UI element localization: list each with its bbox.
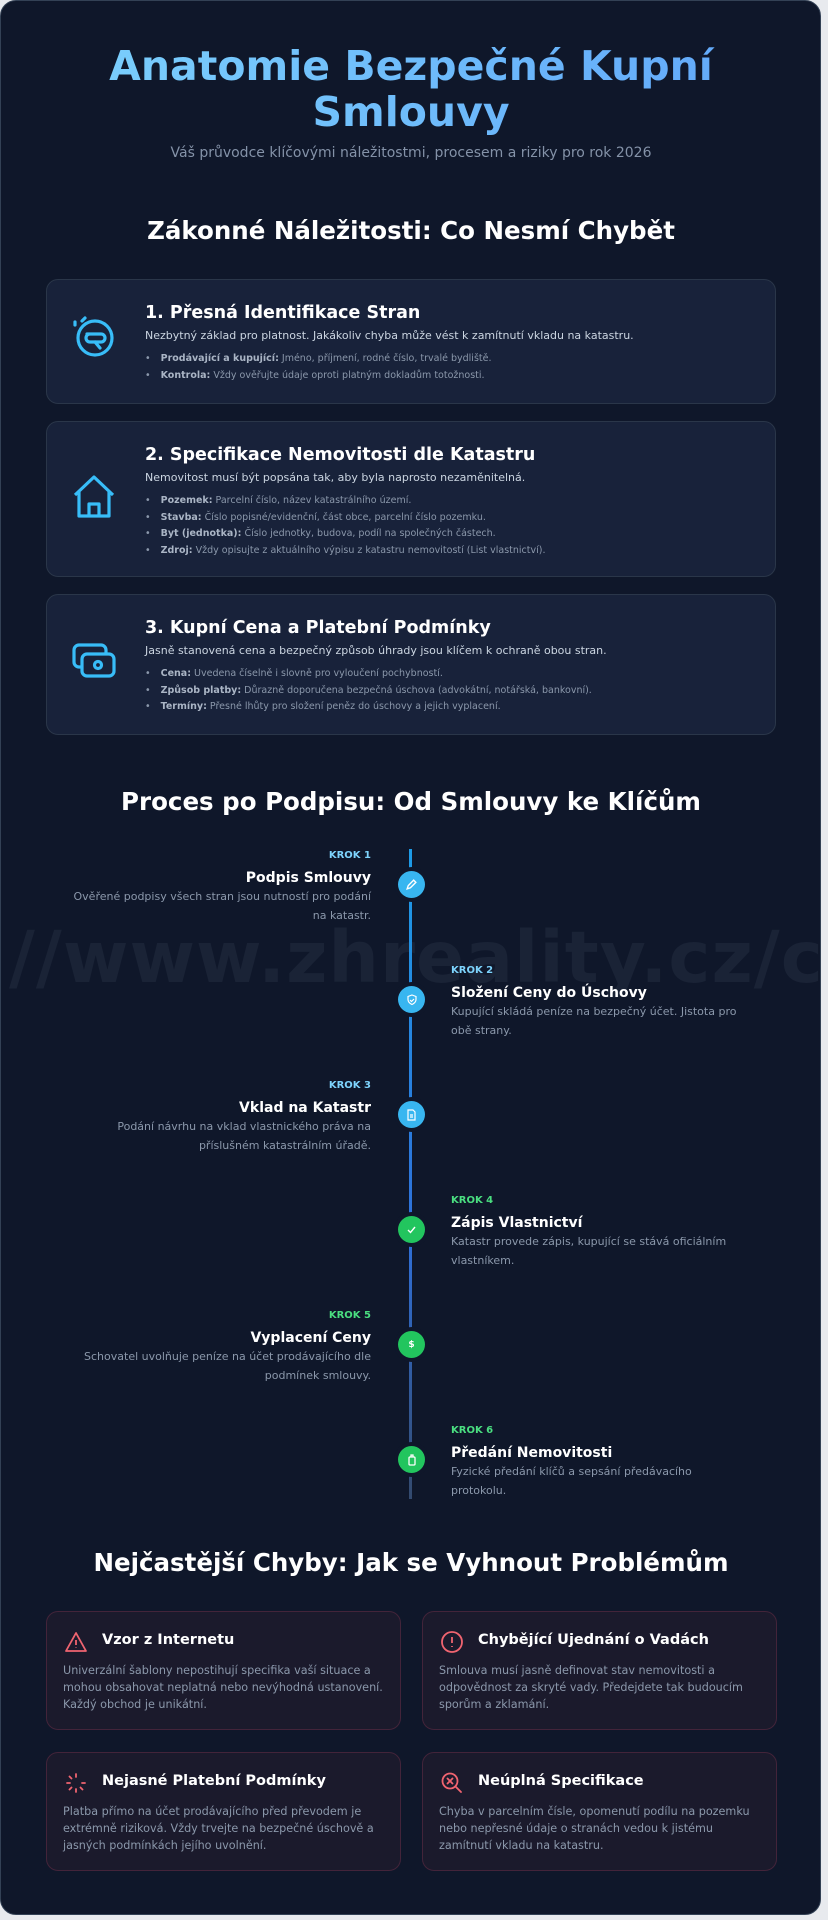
step 5: Vyplacení Ceny [250, 1330, 371, 1346]
panel: property specification: Byt (jednotka): Číslo jednotky, budova, podíl na společných částech. [161, 528, 496, 539]
step 1: KROK 1 [329, 850, 371, 861]
heading: process: Proces po Podpisu: Od Smlouvy ke Klíčům [121, 787, 701, 816]
icon: search x [442, 1772, 462, 1793]
title: Anatomie Bezpečné Kupní [109, 42, 713, 90]
icon: money [72, 643, 116, 678]
step 1: Ověřené podpisy všech stran jsou nutností pro podání [74, 890, 371, 903]
icon: exclamation [441, 1631, 463, 1653]
step 4: Katastr provede zápis, kupující se stává oficiálním [451, 1235, 726, 1248]
step 3: Vklad na Katastr [239, 1100, 371, 1116]
step 1 [74, 850, 372, 922]
step 6: Předání Nemovitosti [451, 1445, 612, 1461]
step 3: příslušném katastrálním úřadě. [199, 1138, 371, 1152]
panel: internet template: Vzor z Internetu [102, 1632, 234, 1648]
panel: incomplete spec: Neúplná Specifikace [478, 1773, 644, 1789]
panel: property specification: Stavba: Číslo popisné/evidenční, část obce, parcelní číslo pozemku. [161, 512, 486, 522]
panel: price: Cena: Uvedena číselně i slovně pro vyloučení pochybností. [161, 668, 443, 679]
step 5: Schovatel uvolňuje peníze na účet prodávajícího dle [84, 1350, 371, 1363]
panel: identification: Kontrola: Vždy ověřujte údaje oproti platným dokladům totožnosti. [161, 370, 485, 380]
step 6: Fyzické předání klíčů a sepsání předávacího [451, 1465, 692, 1478]
step 1: na katastr. [313, 908, 371, 922]
title: Smlouvy [312, 88, 510, 136]
step 2: obě strany. [451, 1024, 512, 1036]
panel: defects: Smlouva musí jasně definovat stav nemovitosti a odpovědnost za skryté vady. Předejdete tak budoucím sporům a zklamání. [439, 1664, 743, 1711]
step 5: KROK 5 [329, 1310, 371, 1321]
step 3 [117, 1080, 371, 1152]
heading: legal requirements: Zákonné Náležitosti: Co Nesmí Chybět [147, 216, 675, 245]
panel: price: 3. Kupní Cena a Platební Podmínky [145, 618, 491, 638]
panel: internet template [46, 1611, 401, 1730]
panel: price: Způsob platby: Důrazně doporučena bezpečná úschova (advokátní, notářská, bankovní). [161, 684, 592, 696]
step 6: protokolu. [451, 1484, 506, 1496]
panel: price: Termíny: Přesné lhůty pro složení peněz do úschovy a jejich vyplacení. [161, 701, 501, 712]
panel: incomplete spec: Chyba v parcelním čísle, opomenutí podílu na pozemku nebo nepřesné údaje o stranách vedou k jistému zamítnutí vkladu na katastru. [439, 1805, 750, 1852]
timeline dot 3 [398, 1101, 425, 1128]
panel: unclear payment [46, 1752, 401, 1871]
panel: property specification: Nemovitost musí být popsána tak, aby byla naprosto nezaměnitelná. [145, 471, 525, 484]
panel: identification [46, 279, 776, 404]
panel: unclear payment: Platba přímo na účet prodávajícího před převodem je extrémně riziková. Vždy trvejte na bezpečné úschově a jasných podmínkách jejího uvolnění. [63, 1805, 374, 1852]
panel: property specification: Pozemek: Parcelní číslo, název katastrálního území. [161, 495, 411, 506]
panel: incomplete spec [422, 1752, 777, 1871]
panel: property specification [46, 421, 776, 577]
panel: identification: Prodávající a kupující: Jméno, příjmení, rodné číslo, trvalé bydliště. [161, 353, 492, 364]
icon: house [74, 475, 114, 518]
timeline line [409, 849, 412, 1499]
subtitle: Váš průvodce klíčovými náležitostmi, procesem a riziky pro rok 2026 [170, 145, 652, 161]
step 5: podmínek smlouvy. [265, 1368, 371, 1382]
step 6 [451, 1425, 692, 1496]
icon: warning [65, 1632, 87, 1652]
step 3: Podání návrhu na vklad vlastnického práva na [117, 1120, 371, 1133]
panel: price [46, 594, 776, 735]
step 4 [451, 1195, 726, 1266]
heading: mistakes: Nejčastější Chyby: Jak se Vyhnout Problémům [93, 1548, 729, 1577]
panel: defects [422, 1611, 777, 1730]
panel: internet template: Univerzální šablony nepostihují specifika vaší situace a mohou obsahovat neplatná nebo nevýhodná ustanovení. Každý obchod je unikátní. [63, 1664, 383, 1711]
icon: loader [66, 1773, 86, 1793]
panel: property specification: 2. Specifikace Nemovitosti dle Katastru [145, 445, 535, 465]
timeline dot 5 [398, 1331, 425, 1358]
panel: identification: Nezbytný základ pro platnost. Jakákoliv chyba může vést k zamítnutí vkladu na katastru. [145, 329, 634, 342]
step 1: Podpis Smlouvy [246, 870, 371, 886]
timeline dot 4 [398, 1216, 425, 1243]
panel: defects: Chybějící Ujednání o Vadách [478, 1632, 709, 1648]
timeline dot 1 [398, 871, 425, 898]
step 2: KROK 2 [451, 965, 493, 976]
timeline dot 2 [398, 986, 425, 1013]
step 2 [451, 965, 736, 1036]
step 2: Složení Ceny do Úschovy [451, 985, 647, 1001]
step 2: Kupující skládá peníze na bezpečný účet. Jistota pro [451, 1005, 736, 1018]
panel: unclear payment: Nejasné Platební Podmínky [102, 1773, 326, 1789]
timeline dot 5: $ [408, 1340, 415, 1350]
timeline dot 6 [398, 1446, 425, 1473]
panel: identification: 1. Přesná Identifikace Stran [145, 303, 420, 323]
panel: price: Jasně stanovená cena a bezpečný způsob úhrady jsou klíčem k ochraně obou stran. [145, 644, 607, 657]
step 5 [84, 1310, 371, 1382]
step 6: KROK 6 [451, 1425, 493, 1436]
step 4: Zápis Vlastnictví [451, 1215, 582, 1231]
step 4: vlastníkem. [451, 1254, 514, 1266]
panel: property specification: Zdroj: Vždy opisujte z aktuálního výpisu z katastru nemovitostí (List vlastnictví). [161, 544, 545, 556]
icon: parties [73, 316, 114, 357]
step 3: KROK 3 [329, 1080, 371, 1091]
title [1, 43, 821, 135]
step 4: KROK 4 [451, 1195, 493, 1206]
